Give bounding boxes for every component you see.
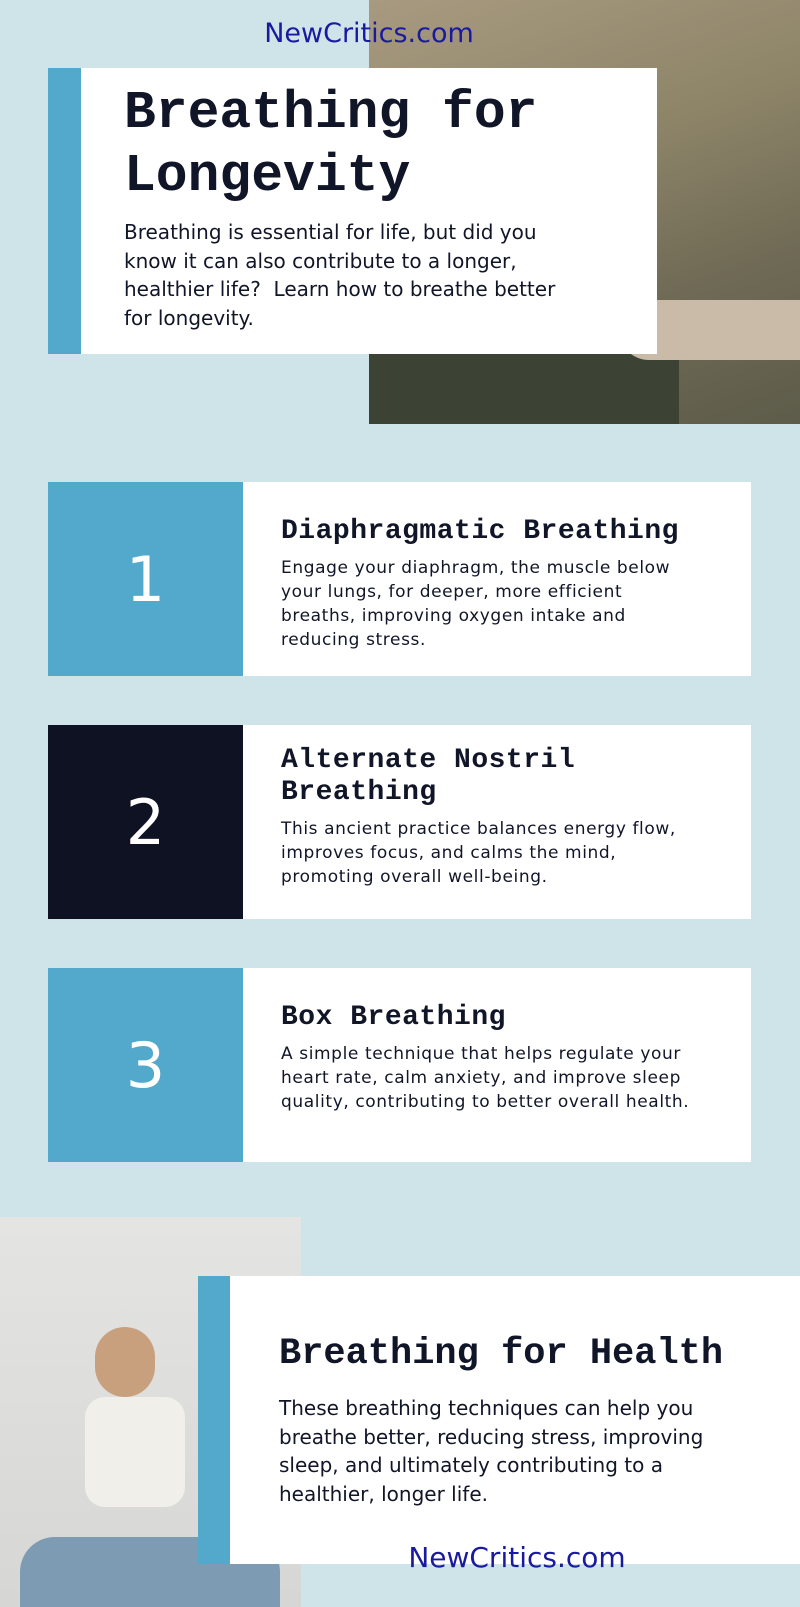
- title panel: [48, 68, 657, 354]
- card 1: Engage your diaphragm, the muscle below your lungs, for deeper, more efficient breaths, improving oxygen intake and reducing stress.: [281, 558, 670, 650]
- card 2: Alternate Nostril Breathing: [281, 745, 575, 808]
- summary heading: Breathing for Health: [279, 1333, 723, 1375]
- photo: top right person: [369, 0, 800, 424]
- card 2: [48, 725, 751, 919]
- intro text: Breathing is essential for life, but did you know it can also contribute to a longer, healthier life? Learn how to breathe better for longevity.: [124, 220, 555, 330]
- card 3: A simple technique that helps regulate your heart rate, calm anxiety, and improve sleep quality, contributing to better overall health.: [281, 1044, 689, 1112]
- card 3: Box Breathing: [281, 1002, 506, 1033]
- card 1: 1: [126, 542, 165, 616]
- title: [124, 83, 537, 206]
- card 1: [48, 482, 751, 676]
- summary text: These breathing techniques can help you breathe better, reducing stress, improving sleep, and ultimately contributing to a healthier, longer life.: [279, 1396, 703, 1506]
- card 2: 2: [126, 786, 165, 858]
- title: Longevity: [124, 146, 410, 206]
- photo: yoga woman: [0, 1217, 301, 1607]
- card 3: [48, 968, 751, 1162]
- card 1: Diaphragmatic Breathing: [281, 516, 679, 547]
- logo bottom: NewCritics.com: [408, 1541, 626, 1574]
- logo top: NewCritics.com: [264, 18, 474, 49]
- card 2: This ancient practice balances energy flow, improves focus, and calms the mind, promoting overall well-being.: [281, 819, 676, 887]
- card 3: 3: [126, 1028, 165, 1102]
- title: Breathing for: [124, 83, 537, 143]
- summary panel: [198, 1276, 800, 1564]
